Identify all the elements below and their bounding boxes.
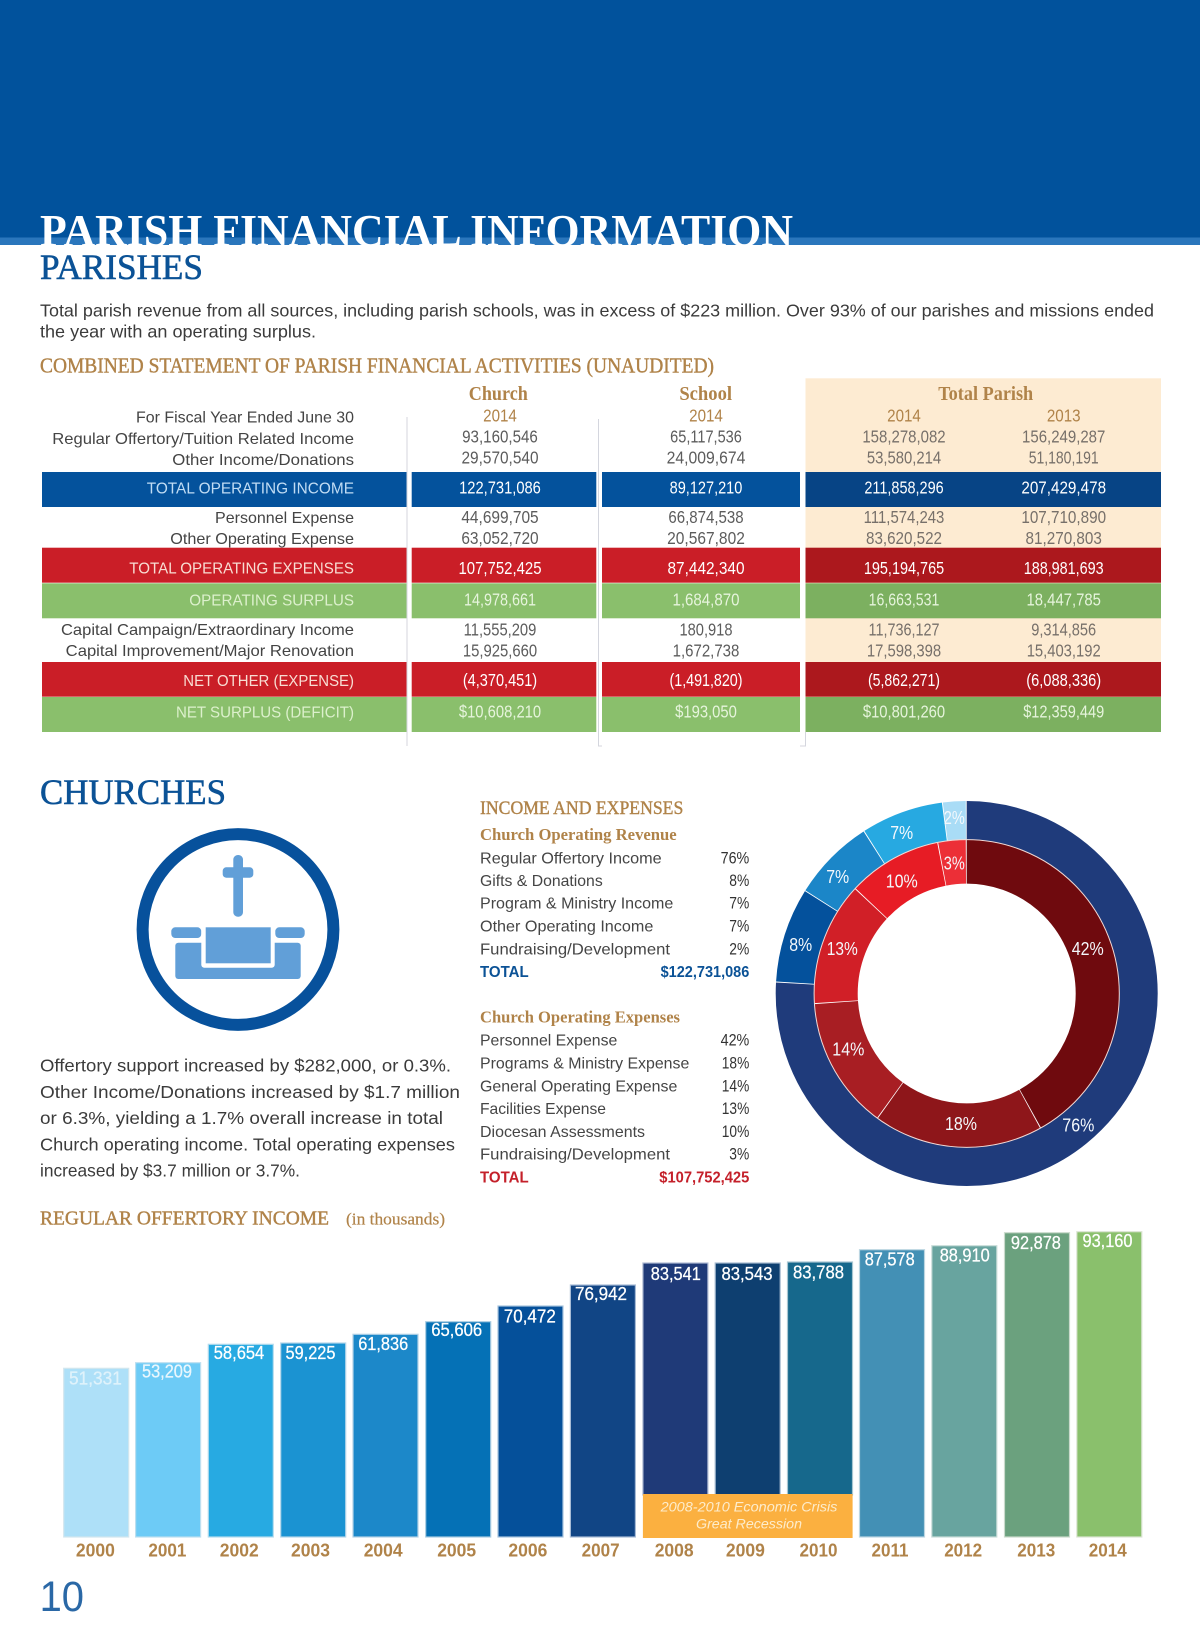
total parish 2014 values: 158,278,082 [862,427,946,447]
total parish 2013 values: 51,180,191 [1029,448,1099,468]
school column values: 1,684,870 [672,589,740,609]
row labels: TOTAL OPERATING EXPENSES [129,561,354,578]
total parish 2013 values: 188,981,693 [1024,558,1104,578]
bar values [69,1231,1132,1388]
list: church operating expenses: $107,752,425 [659,1169,749,1186]
bar values: 92,878 [1011,1233,1061,1253]
column headings: Church [469,383,528,405]
donut labels: 76% [1062,1116,1094,1136]
donut labels: 10% [886,872,918,892]
inner ring: expenses [814,840,1119,1147]
column headings [469,383,1081,425]
list: church operating revenue: Other Operating Income [480,919,653,936]
row labels: For Fiscal Year Ended June 30 [136,410,354,427]
year axis labels: 2000 [76,1541,115,1561]
donut labels: 7% [890,823,913,843]
churches text block: Other Income/Donations increased by $1.7 million [40,1082,460,1102]
donut labels: 2% [944,808,965,828]
column headings: 2014 [689,405,723,425]
list: church operating expenses [480,1007,750,1186]
total parish 2014 values: $10,801,260 [863,701,945,721]
year axis labels: 2012 [944,1541,982,1561]
year axis labels: 2005 [437,1541,476,1561]
list: church operating revenue: 7% [729,918,750,936]
list: church operating expenses: Facilities Expense [480,1101,606,1118]
list: church operating expenses: Fundraising/Development [480,1147,671,1164]
donut labels: 3% [944,853,965,873]
church column values: 107,752,425 [458,558,542,578]
callout: economic crisis: Great Recession [696,1515,802,1531]
list: church operating expenses: 13% [722,1100,750,1118]
school column values: (1,491,820) [670,670,742,690]
church column values: 11,555,209 [464,619,536,639]
church column values: 63,052,720 [461,528,539,548]
total parish 2014 values: 111,574,243 [864,507,944,527]
page number: 10 [40,1573,84,1621]
donut labels: 18% [945,1114,977,1134]
bar chart: regular offertory income [64,1231,1142,1561]
year axis labels: 2013 [1017,1541,1055,1561]
school column values: 1,672,738 [673,640,739,660]
row labels: TOTAL OPERATING INCOME [147,480,354,497]
row labels: NET SURPLUS (DEFICIT) [176,704,354,721]
list heading: INCOME AND EXPENSES [480,798,683,819]
total parish background [806,378,1161,732]
donut labels [789,808,1104,1136]
church column values: 14,978,661 [464,589,536,609]
list: church operating expenses: General Operating Expense [480,1078,677,1095]
bar values: 53,209 [142,1362,192,1382]
total parish 2013 values: $12,359,449 [1023,701,1104,721]
row labels [52,410,354,721]
school column values: 180,918 [680,619,733,639]
row labels: Other Income/Donations [172,452,354,469]
year axis labels: 2008 [655,1541,694,1561]
bar values: 51,331 [69,1368,122,1388]
churches text block: Offertory support increased by $282,000, or 0.3%. [40,1056,451,1076]
total parish 2013 values: 18,447,785 [1027,589,1101,609]
list: church operating expenses: TOTAL [480,1169,529,1186]
list: church operating expenses: Church Operating Expenses [480,1007,680,1026]
list: church operating revenue: Church Operating Revenue [480,825,677,844]
list: church operating revenue: Regular Offertory Income [480,850,662,867]
list: church operating expenses: Diocesan Assessments [480,1124,645,1141]
total parish 2013 values: 207,429,478 [1021,477,1106,497]
year axis labels: 2006 [508,1541,547,1561]
bar values: 87,578 [865,1250,915,1270]
list: church operating revenue [480,825,750,981]
total parish 2013 values [1021,427,1106,721]
heading: regular offertory income: (in thousands) [346,1209,445,1228]
year axis labels: 2010 [800,1541,838,1561]
church column values: 15,925,660 [463,640,537,660]
title: PARISH FINANCIAL INFORMATION [40,206,793,256]
bar values: 83,543 [722,1264,772,1284]
heading: churches: CHURCHES [40,772,226,812]
bar values: 76,942 [575,1284,627,1304]
header band [0,0,1200,245]
year axis labels: 2009 [726,1541,765,1561]
church column values [458,427,542,721]
total parish 2013 values: (6,088,336) [1026,670,1101,690]
row bands [42,472,1161,732]
intro text: Total parish revenue from all sources, including parish schools, was in excess of $223 million. Over 93% of our parishes and missions ended [40,301,1154,321]
list: church operating expenses: 3% [729,1146,750,1164]
school column values: 87,442,340 [668,558,745,578]
church column values: $10,608,210 [459,701,541,721]
school column values: $193,050 [675,701,737,721]
churches text block: increased by $3.7 million or 3.7%. [40,1160,300,1180]
bar values: 59,225 [286,1343,336,1363]
bar values: 88,910 [940,1246,990,1266]
donut chart [789,808,1138,1167]
school column values: 89,127,210 [670,477,742,497]
school column values [667,427,745,721]
panel: income and expenses list [480,798,750,1186]
total parish 2014 values: 83,620,522 [866,528,942,548]
year axis labels [76,1541,1127,1561]
year axis labels: 2002 [220,1541,259,1561]
list: church operating revenue: 8% [729,872,750,890]
list: church operating revenue: 2% [729,940,750,958]
row labels: OPERATING SURPLUS [189,592,354,609]
row labels: NET OTHER (EXPENSE) [183,673,354,690]
panel: financial activities table [42,378,1161,746]
total parish 2014 values: 16,663,531 [869,589,939,609]
year axis labels: 2007 [582,1541,620,1561]
bar values: 83,541 [651,1264,701,1284]
total parish 2013 values: 9,314,856 [1031,619,1096,639]
bar values: 58,654 [214,1343,264,1363]
total parish 2014 values: 17,598,398 [867,640,941,660]
school column values: 20,567,802 [667,528,745,548]
row labels: Regular Offertory/Tuition Related Income [52,431,354,448]
churches text block [40,1056,460,1180]
intro text [40,301,1154,342]
list: church operating revenue: $122,731,086 [661,964,749,981]
row labels: Personnel Expense [215,510,354,527]
intro text: the year with an operating surplus. [40,322,316,342]
column headings: 2013 [1047,405,1081,425]
donut labels: 7% [826,867,849,887]
table heading: COMBINED STATEMENT OF PARISH FINANCIAL ACTIVITIES (UNAUDITED) [40,354,714,378]
list: church operating expenses: 18% [722,1055,750,1073]
total parish 2014 values: 211,858,296 [864,477,944,497]
list: church operating expenses: 42% [721,1032,750,1050]
list: church operating expenses: Programs & Ministry Expense [480,1056,689,1073]
total parish 2013 values: 15,403,192 [1027,640,1101,660]
list: church operating revenue: Fundraising/Development [480,941,671,958]
outer ring: revenue [795,820,1138,1167]
year axis labels: 2014 [1089,1541,1127,1561]
school column values: 65,117,536 [670,427,742,447]
total parish 2013 values: 107,710,890 [1021,507,1106,527]
heading: parishes: PARISHES [40,247,203,287]
donut labels: 14% [832,1040,864,1060]
list: church operating expenses: Personnel Expense [480,1033,617,1050]
row labels: Capital Campaign/Extraordinary Income [61,622,354,639]
list: church operating revenue: TOTAL [480,964,529,981]
row labels: Capital Improvement/Major Renovation [66,643,354,660]
year axis labels: 2004 [364,1541,403,1561]
church column values: (4,370,451) [463,670,537,690]
bars [64,1232,1142,1537]
callout: economic crisis [643,1494,853,1538]
column headings: Total Parish [938,383,1033,405]
bar values: 83,788 [793,1263,844,1283]
bar values: 93,160 [1082,1231,1132,1251]
total parish 2013 values: 156,249,287 [1022,427,1105,447]
list: church operating revenue: Gifts & Donations [480,873,603,890]
total parish 2014 values: (5,862,271) [868,670,940,690]
list: church operating expenses: 10% [722,1123,750,1141]
list: church operating expenses: 14% [722,1077,750,1095]
donut labels: 8% [789,935,812,955]
heading: regular offertory income: REGULAR OFFERTORY INCOME [40,1208,329,1229]
icon: altar with cross [143,834,333,1025]
bar values: 61,836 [358,1334,408,1354]
churches text block: or 6.3%, yielding a 1.7% overall increase in total [40,1108,443,1128]
church column values: 44,699,705 [461,507,539,527]
total parish 2013 values: 81,270,803 [1026,528,1102,548]
callout: economic crisis: 2008-2010 Economic Crisis [660,1499,837,1515]
list: church operating revenue: Program & Ministry Income [480,896,673,913]
bar values: 65,606 [431,1320,482,1340]
church column values: 93,160,546 [462,427,538,447]
column headings: 2014 [483,405,517,425]
year axis labels: 2003 [291,1541,330,1561]
donut labels: 42% [1072,939,1104,959]
list: church operating revenue: 76% [721,849,750,867]
column headings: School [679,383,732,405]
list: church operating revenue: 7% [729,895,750,913]
year axis labels: 2011 [872,1541,908,1561]
church column values: 122,731,086 [459,477,541,497]
school column values: 24,009,674 [667,448,745,468]
churches text block: Church operating income. Total operating expenses [40,1134,455,1154]
school column values: 66,874,538 [668,507,744,527]
total parish 2014 values: 53,580,214 [867,448,941,468]
total parish 2014 values [862,427,946,721]
column headings: 2014 [887,405,921,425]
total parish 2014 values: 195,194,765 [864,558,944,578]
row labels: Other Operating Expense [170,531,354,548]
bar values: 70,472 [504,1306,556,1326]
donut labels: 13% [827,939,858,959]
church column values: 29,570,540 [462,448,539,468]
total parish 2014 values: 11,736,127 [868,619,940,639]
year axis labels: 2001 [148,1541,186,1561]
